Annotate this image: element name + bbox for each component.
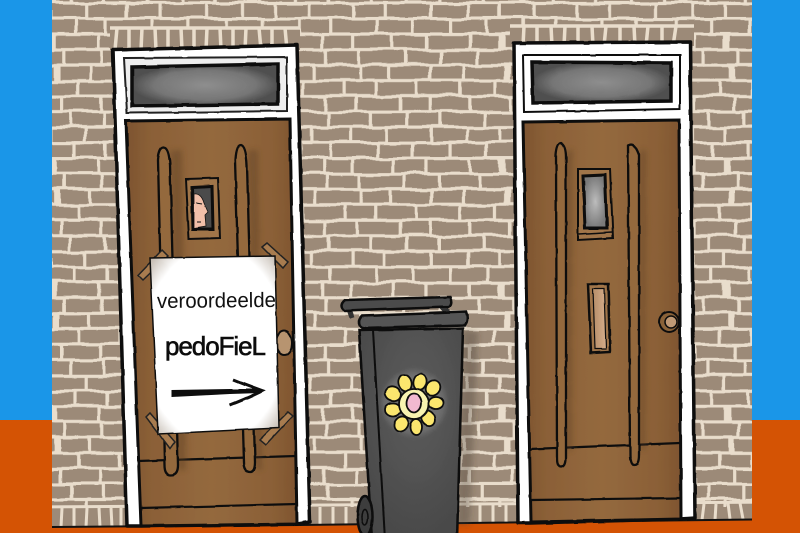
- right door stile right: [628, 144, 639, 465]
- right door frame: [514, 42, 695, 523]
- bin shadow on wall: [457, 330, 478, 525]
- left door panel: [126, 119, 297, 526]
- soldier course above left door: [110, 28, 300, 50]
- tape top left: [138, 250, 168, 280]
- sign text: pedofiel: pedoFieL: [165, 331, 266, 361]
- left door stile right: [235, 145, 255, 472]
- left door lower rails: [138, 456, 297, 508]
- tape bottom right: [260, 412, 293, 445]
- bin side panel line: [373, 330, 385, 533]
- soldier course above right door: [510, 26, 694, 46]
- sign text: veroordeelde: veroordeelde: [157, 289, 276, 313]
- bin handle bar: [342, 297, 451, 318]
- bin body: [359, 328, 463, 533]
- right door lower rails: [530, 443, 681, 500]
- sign sheet: [150, 256, 279, 434]
- flower sticker: [382, 371, 446, 435]
- left door peephole window with face: [186, 178, 220, 239]
- left door knob: [276, 331, 292, 355]
- right transom window: [523, 55, 680, 112]
- left transom window: [124, 57, 287, 113]
- right door window: [578, 169, 613, 240]
- arrow on sign: [172, 380, 262, 405]
- right door assembly: [514, 42, 695, 523]
- right door knob: [659, 312, 679, 332]
- right door stile left: [556, 143, 566, 467]
- left door assembly: [113, 45, 310, 526]
- soldier course along bottom of wall: [30, 502, 775, 530]
- left door stile left: [158, 147, 178, 475]
- right door letter slot: [588, 284, 610, 353]
- stile shadows left door: [170, 150, 262, 470]
- right door panel: [523, 120, 681, 522]
- tape top right: [262, 243, 288, 268]
- bin lid bar: [359, 312, 467, 328]
- background: blue sky: [0, 0, 800, 420]
- wheelie bin: [342, 297, 478, 533]
- stile shadows right door: [566, 150, 646, 450]
- bin wheel: [358, 496, 372, 533]
- tape bottom left: [146, 413, 175, 449]
- background: orange ground: [0, 420, 800, 533]
- left door frame: [113, 45, 310, 526]
- face: [194, 194, 208, 228]
